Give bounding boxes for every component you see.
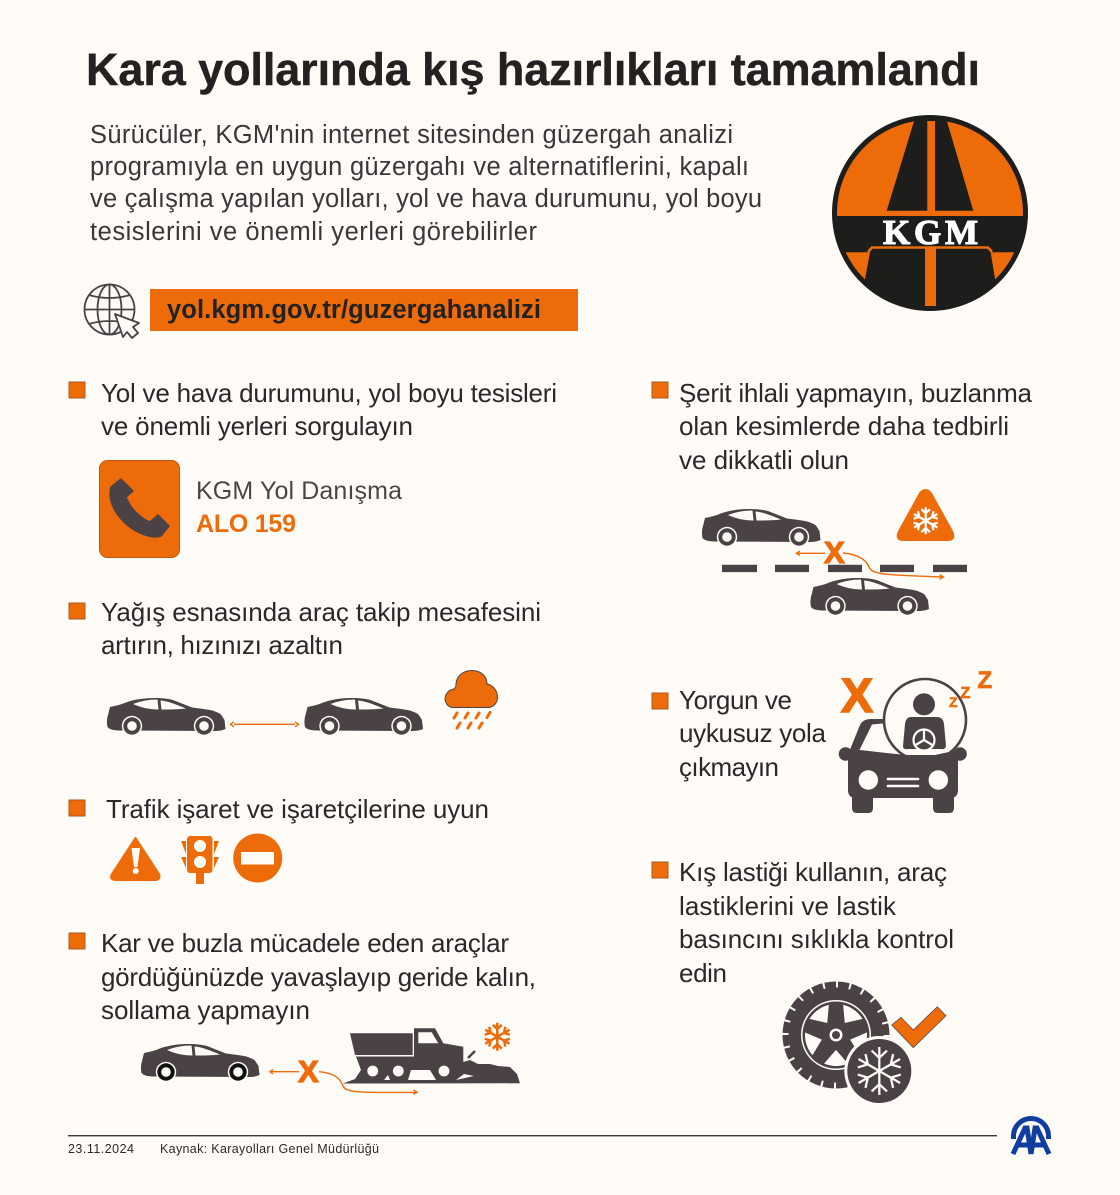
footer source: 23.11.2024: [68, 1142, 134, 1156]
bullet: snow plough: Kar ve buzla mücadele eden araçlar: [101, 928, 509, 958]
icon: sleepy driver in car: X: [841, 670, 873, 723]
bullet: road and weather query: ve önemli yerleri sorgulayın: [101, 411, 413, 441]
intro text: tesislerini ve önemli yerleri görebilirler: [90, 218, 538, 246]
bullet: tired driver: Yorgun ve: [679, 685, 792, 715]
icon: KGM logo: [830, 115, 1030, 311]
bullet: lane discipline: ve dikkatli olun: [679, 445, 849, 475]
bullet: snow plough: gördüğünüzde yavaşlayıp geride kalın,: [101, 962, 536, 992]
icon: sleepy driver in car: [839, 667, 992, 813]
bullet: tired driver: çıkmayın: [679, 752, 779, 782]
bullet: winter tyres: Kış lastiği kullanın, araç: [679, 857, 947, 887]
url bar: [150, 289, 578, 331]
bullet: tired driver: uykusuz yola: [679, 718, 827, 748]
bullet: lane discipline: Şerit ihlali yapmayın, buzlanma: [679, 378, 1033, 408]
bullet: winter tyres: basıncını sıklıkla kontrol: [679, 924, 954, 954]
lane change arrows: X: [824, 535, 845, 570]
icon: orange snowflake: [483, 1023, 512, 1051]
no-overtake arrows: [270, 1054, 417, 1094]
bullet: snow plough: sollama yapmayın: [101, 995, 310, 1025]
icon: tyre with snowflake and check: [782, 982, 946, 1106]
icon: no entry sign: [233, 834, 282, 882]
lane change arrows: [796, 535, 944, 579]
icon: sleepy driver in car: Z: [960, 685, 970, 702]
icon: rain cloud: [445, 670, 497, 728]
icon: globe with cursor: [84, 284, 139, 338]
bullet: winter tyres: edin: [679, 958, 727, 988]
bullet: traffic signs: Trafik işaret ve işaretçilerine uyun: [106, 794, 489, 824]
icon: AA logo: [1013, 1118, 1049, 1154]
cars keeping distance: [107, 698, 423, 736]
url bar: yol.kgm.gov.tr/guzergahanalizi: [167, 296, 541, 324]
icon: sleepy driver in car: Z: [949, 694, 958, 710]
bullet: road and weather query: Yol ve hava durumunu, yol boyu tesisleri: [101, 378, 557, 408]
bullet: winter tyres: [652, 857, 954, 988]
bullet: snow plough: [69, 928, 536, 1025]
bullet: road and weather query: [69, 378, 557, 441]
bullet: winter tyres: lastiklerini ve lastik: [679, 891, 897, 921]
bullet: rain: Yağış esnasında araç takip mesafesini: [101, 597, 541, 627]
cars on lane: [702, 509, 967, 616]
intro text: ve çalışma yapılan yolları, yol ve hava durumunu, yol boyu: [90, 185, 762, 213]
title: Kara yollarında kış hazırlıkları tamamlandı: [86, 44, 980, 95]
icon: warning triangle: [111, 838, 160, 880]
intro text: Sürücüler, KGM'nin internet sitesinden güzergah analizi: [90, 121, 733, 149]
hotline text: KGM Yol Danışma: [196, 477, 402, 505]
icon: phone tile: [100, 460, 180, 558]
bullet: tired driver: [652, 685, 827, 782]
icon: snow warning triangle: [897, 489, 954, 541]
bullet: lane discipline: olan kesimlerde daha tedbirli: [679, 411, 1009, 441]
no-overtake arrows: X: [298, 1054, 319, 1089]
car behind plough: [141, 1044, 260, 1082]
bullet: lane discipline: [652, 378, 1033, 475]
intro text: [90, 121, 762, 246]
footer rule: [68, 1135, 997, 1136]
footer source: Kaynak: Karayolları Genel Müdürlüğü: [160, 1142, 379, 1156]
icon: snow plough truck: [343, 1028, 520, 1084]
icon: sleepy driver in car: Z: [978, 667, 992, 694]
intro text: programıyla en uygun güzergahı ve alternatiflerini, kapalı: [90, 153, 749, 181]
hotline text: ALO 159: [196, 510, 296, 538]
bullet: rain: [69, 597, 541, 660]
hotline text: [196, 477, 402, 538]
icon: KGM logo: KGM: [883, 213, 978, 252]
bullet: rain: artırın, hızınızı azaltın: [101, 630, 343, 660]
icon: traffic light: [181, 836, 219, 884]
